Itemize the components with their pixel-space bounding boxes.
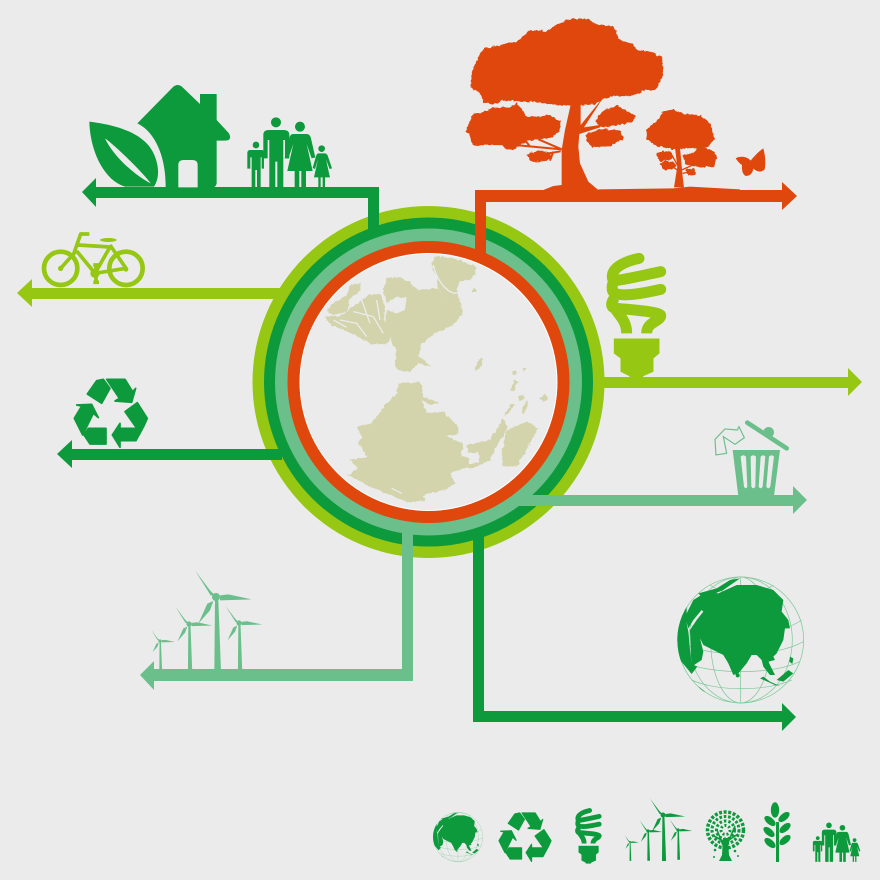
icon: trash can with recycling arrow — [715, 423, 787, 496]
arrow: bulb, lime — [598, 368, 862, 396]
icon: light bulb — [612, 258, 661, 379]
icon row: small plant — [761, 802, 793, 862]
icon: trees and butterfly — [467, 19, 765, 192]
arrow: globe, dark green — [473, 535, 796, 731]
icon row: small globe — [432, 812, 483, 862]
arrow: trash, light green, emerging from the ring — [517, 486, 807, 514]
pale world map inside ring — [326, 257, 548, 502]
arrow: wind turbines, light green — [140, 530, 413, 690]
icon row: small family — [813, 823, 860, 862]
icon: Asia globe — [675, 577, 804, 703]
icon: wind turbines — [151, 570, 262, 672]
arrow: bicycle, lime — [17, 279, 282, 307]
icon: house — [137, 85, 230, 187]
icon row: small turbines — [625, 798, 692, 861]
icon: family — [247, 117, 332, 187]
icon row: small tree — [708, 812, 744, 861]
icon row: small recycling — [499, 813, 551, 861]
icon: bicycle — [44, 234, 143, 285]
arrow: recycling, dark green — [57, 440, 282, 468]
arrow: house and family, dark green — [82, 178, 379, 232]
icon: recycling — [74, 379, 147, 447]
icon: leaf — [89, 122, 158, 187]
central ring stack — [252, 206, 604, 558]
arrow: trees, orange — [475, 182, 797, 256]
icon row: small bulb — [578, 810, 599, 864]
